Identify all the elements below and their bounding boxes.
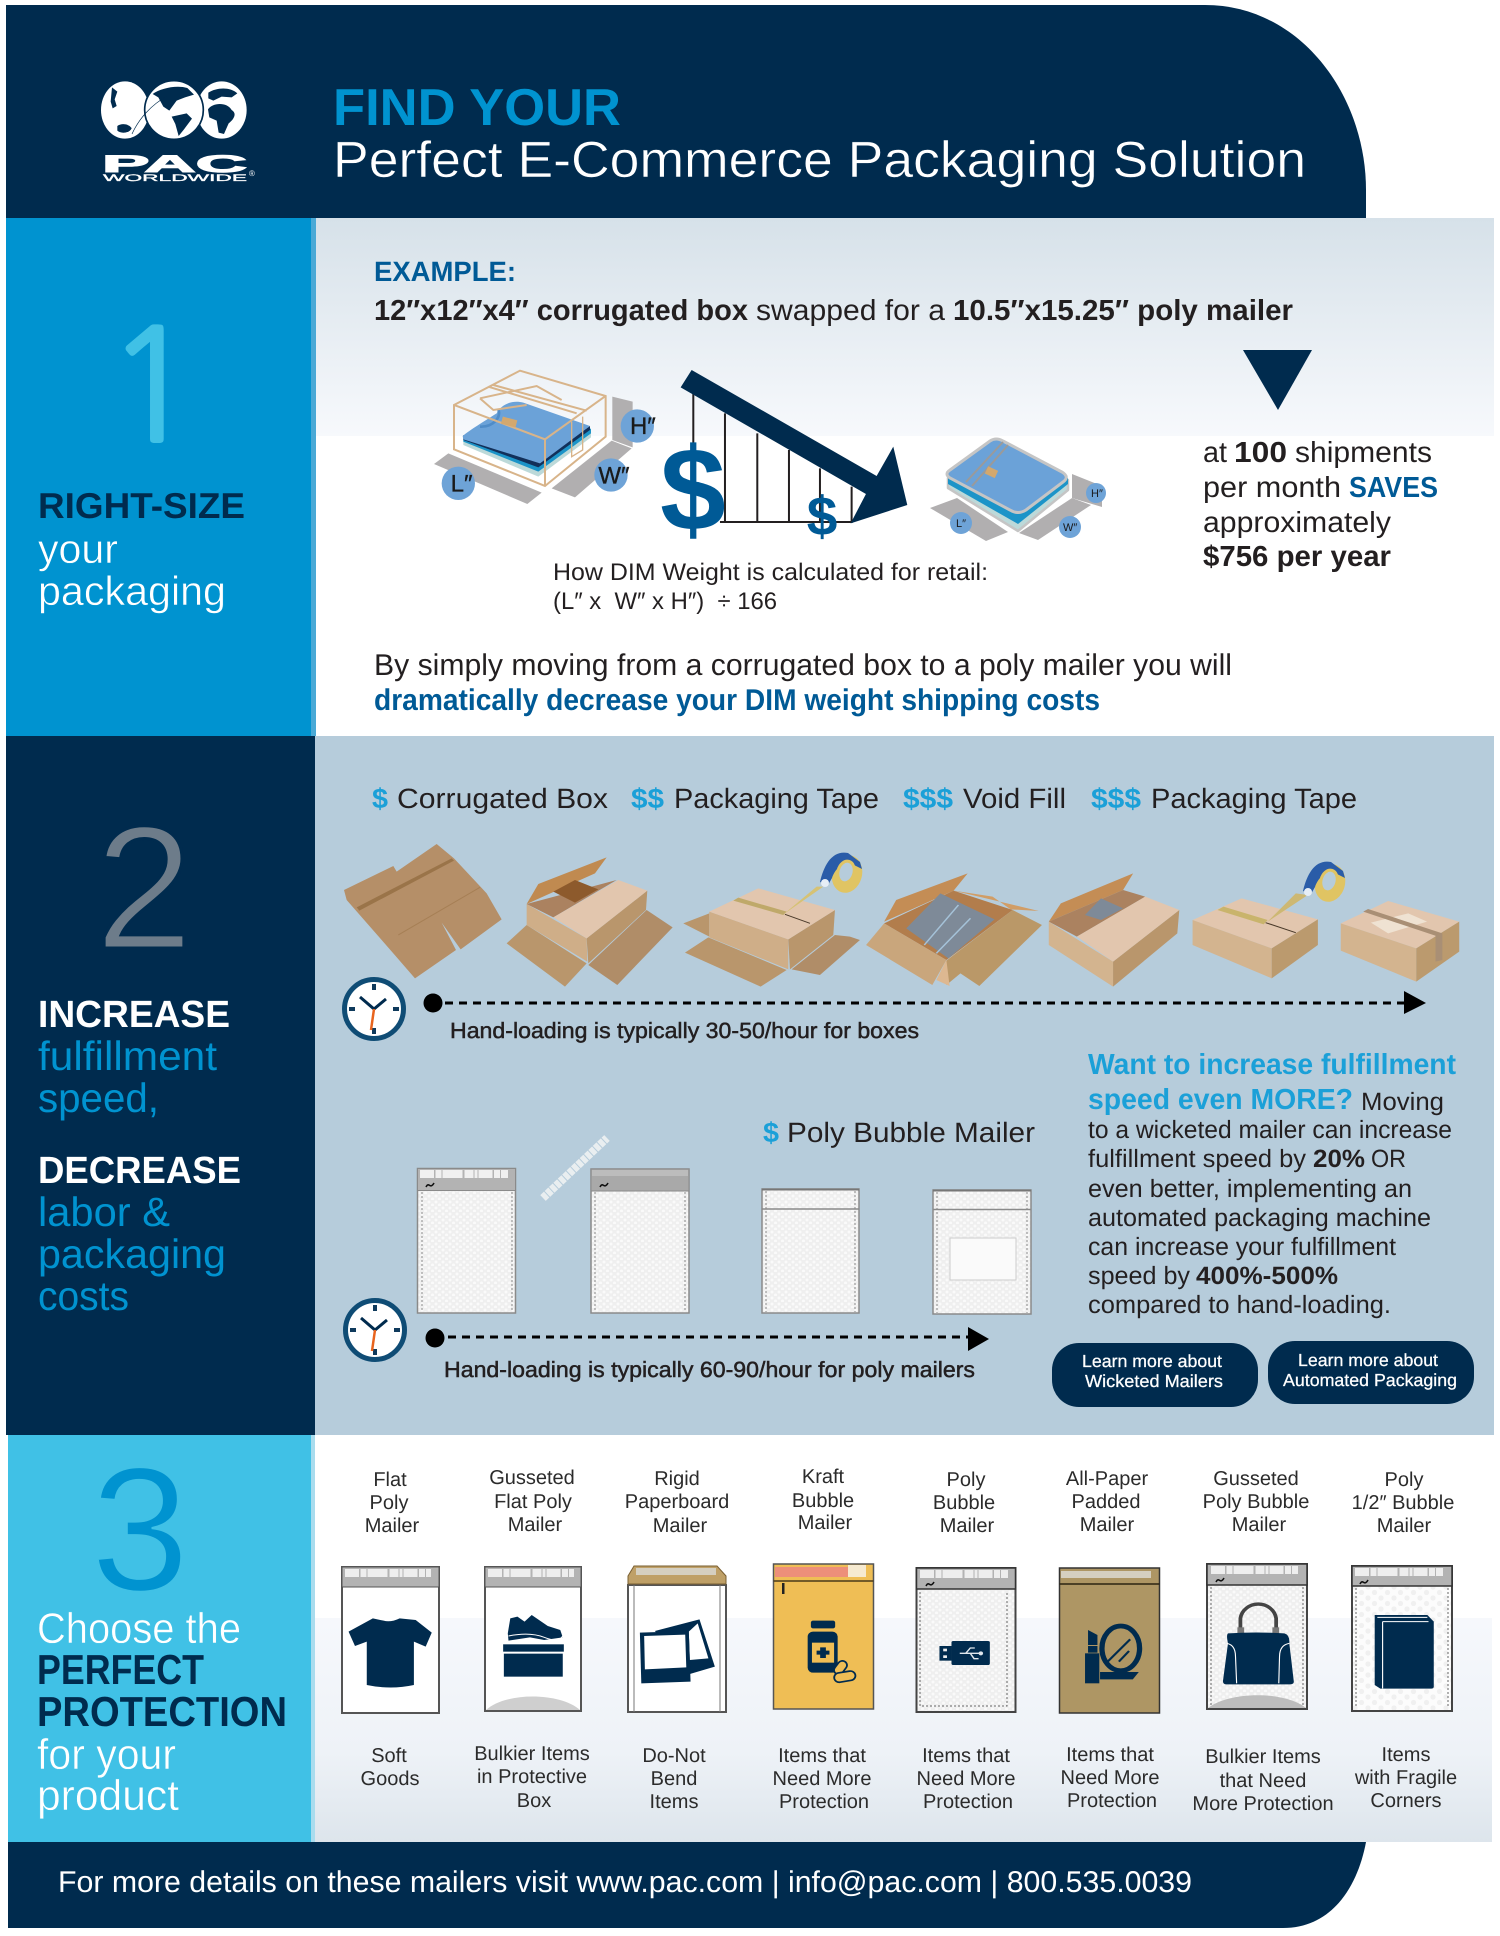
cost row labels: Packaging Tape [1151,783,1357,814]
button: wicketed mailers [1052,1343,1258,1407]
illustration: poly mailer steps [418,1138,1031,1314]
timeline one [424,991,1426,1014]
mailer step two [591,1169,689,1313]
mailer column: gusseted flat poly: Mailer [508,1514,563,1536]
mailer column: gusseted flat poly: Box [517,1790,551,1812]
section 3 heading: PROTECTION [37,1688,287,1735]
icon: shoe on box [503,1615,564,1677]
mailer column: poly bubble: Bubble [933,1492,995,1514]
callout: increase fulfillment: speed by [1088,1262,1190,1290]
section 1 heading: RIGHT-SIZE [38,485,245,526]
mailer column: all-paper padded: Mailer [1080,1514,1135,1536]
section 2 heading: fulfillment [38,1033,218,1079]
mailer column: flat poly: Soft [371,1745,407,1767]
section 1 conclusion: By simply moving from a corrugated box to a poly mailer you will [374,649,1232,682]
mailer column: kraft bubble: Items that [778,1745,866,1767]
mailer column: gusseted poly bubble: Gusseted [1213,1468,1299,1490]
cost row labels: Packaging Tape [674,783,879,814]
icon: clock two [346,1300,404,1360]
mailer column: all-paper padded: Items that [1066,1744,1154,1766]
mailer column: kraft bubble [773,1466,874,1813]
callout: increase fulfillment: speed even MORE? [1088,1084,1353,1116]
mailer column: gusseted flat poly: Gusseted [489,1467,575,1489]
hand-loading boxes note: Hand-loading is typically 30-50/hour for boxes [450,1018,919,1043]
callout: increase fulfillment: Want to increase fulfillment [1088,1049,1456,1081]
mailer column: gusseted flat poly: Flat Poly [494,1491,572,1513]
example text [374,256,1293,327]
mailer step four [933,1190,1031,1314]
icon: down triangle [1243,350,1312,410]
mailer column: gusseted flat poly: in Protective [477,1766,587,1788]
mailer column: kraft bubble: Bubble [792,1490,854,1512]
mailer column: all-paper padded: Need More [1061,1767,1159,1789]
DIM weight formula: How DIM Weight is calculated for retail: [553,559,988,586]
button: automated packaging: Learn more about [1298,1350,1438,1370]
callout: increase fulfillment: compared to hand-loading. [1088,1291,1391,1319]
example text: 10.5″x15.25″ poly mailer [953,295,1293,327]
section 1 conclusion [374,649,1232,717]
mailer column: gusseted poly bubble: Poly Bubble [1203,1491,1309,1513]
mailer step one [418,1168,516,1313]
mailer column: gusseted poly bubble: Mailer [1232,1514,1287,1536]
mailer column: gusseted poly bubble: that Need [1220,1770,1306,1792]
icon: lipstick and mirror [1085,1626,1140,1683]
callout: increase fulfillment: can increase your fulfillment [1088,1233,1396,1261]
callout: increase fulfillment: to a wicketed mailer can increase [1088,1116,1452,1144]
mailer column: rigid paperboard: Bend [651,1768,697,1790]
savings text: 100 [1234,437,1287,469]
hand-loading mailers note: Hand-loading is typically 60-90/hour for poly mailers [444,1357,975,1382]
callout: increase fulfillment: 400%-500% [1196,1262,1338,1290]
mailer column: rigid paperboard: Paperboard [625,1491,729,1513]
illustration: corrugated box dimensions: L″ [451,470,473,497]
callout: increase fulfillment: OR [1371,1145,1406,1173]
callout: increase fulfillment: fulfillment speed by [1088,1145,1306,1173]
mailer column: gusseted flat poly: Bulkier Items [474,1743,590,1765]
panel: section 1 right-size [6,218,1494,736]
mailer column: poly bubble: Mailer [940,1515,995,1537]
section 2 heading: DECREASE [38,1150,241,1192]
illustration: poly mailer dimensions [930,439,1106,541]
cost row labels: $ [372,783,388,814]
mailer column: poly bubble [916,1469,1016,1813]
mailer column: half-inch poly bubble [1352,1469,1457,1812]
title: Perfect E-Commerce Packaging Solution [333,131,1306,188]
mailer column: half-inch poly bubble: 1/2″ Bubble [1352,1492,1454,1514]
button: wicketed mailers: Learn more about [1082,1351,1222,1371]
mailer column: gusseted poly bubble: Bulkier Items [1205,1746,1321,1768]
mailer column: flat poly [342,1469,439,1790]
panel: section 3 protection [8,1432,1492,1842]
savings text: shipments [1295,437,1432,469]
mailer column: half-inch poly bubble: Poly [1385,1469,1423,1491]
mailer column: half-inch poly bubble: Mailer [1377,1515,1432,1537]
example text: 12″x12″x4″ corrugated box [374,295,748,327]
icon: photos [640,1619,715,1683]
icon: book [1375,1615,1434,1689]
mailer column: poly bubble: Poly [947,1469,985,1491]
illustration: poly mailer dimensions: W″ [1063,522,1077,534]
illustration: falling cost arrow: $ [807,485,837,547]
button: automated packaging: Automated Packaging [1283,1370,1457,1390]
illustration: poly mailer dimensions: L″ [956,518,966,530]
mailer column: half-inch poly bubble: Corners [1370,1790,1442,1812]
mailer column: poly bubble: Items that [922,1745,1010,1767]
illustration: falling cost arrow [660,370,907,556]
illustration: poly mailer dimensions: H″ [1091,488,1103,500]
section 2 heading: speed, [38,1075,159,1121]
callout: increase fulfillment: Moving [1361,1088,1444,1116]
cost row labels: $$$ [1091,783,1141,814]
section 2 heading: costs [38,1273,129,1319]
mailer column: poly bubble: Protection [923,1791,1013,1813]
mailer column: all-paper padded [1060,1468,1160,1812]
DIM weight formula [553,559,988,615]
mailer column: kraft bubble: Protection [779,1791,869,1813]
icon: tape dispenser one [820,852,866,896]
savings text [1203,437,1438,573]
section 3 heading: product [37,1772,179,1820]
mailer column: all-paper padded: Protection [1067,1790,1157,1812]
mailer step three [762,1189,859,1313]
mailer column: half-inch poly bubble: Items [1382,1744,1430,1766]
button: automated packaging [1268,1341,1474,1404]
mailer column: flat poly: Flat [373,1469,407,1491]
mailer column: all-paper padded: Padded [1072,1491,1140,1513]
footer band: For more details on these mailers visit www.pac.com | info@pac.com | 800.535.0039 [58,1866,1192,1899]
poly bubble mailer label: $ [763,1117,779,1148]
section 2 heading: packaging [38,1231,226,1277]
cost row labels: Void Fill [963,783,1066,814]
illustration: box steps four to seven [866,873,1459,987]
logo: WORLDWIDE [103,173,247,184]
mailer column: kraft bubble: Mailer [798,1512,853,1534]
section 2 heading: INCREASE [38,994,230,1036]
footer band [8,1842,1366,1928]
icon: USB drive [939,1641,990,1665]
mailer column: kraft bubble: Need More [773,1768,871,1790]
peel strip [543,1138,607,1198]
mailer column: all-paper padded: All-Paper [1066,1468,1148,1490]
panel: section 2 speed [6,736,1494,1435]
section 1 heading [38,485,245,614]
mailer column: gusseted flat poly [474,1467,590,1812]
icon: t-shirt [349,1618,432,1687]
callout: increase fulfillment [1088,1049,1456,1319]
illustration: corrugated box dimensions [434,371,656,504]
mailer column: flat poly: Goods [361,1768,419,1790]
button: wicketed mailers: Wicketed Mailers [1085,1371,1223,1391]
poly bubble mailer label: Poly Bubble Mailer [787,1117,1035,1148]
mailer column: flat poly: Mailer [365,1515,420,1537]
section 1 conclusion: dramatically decrease your DIM weight shipping costs [374,684,1100,717]
cost row labels [372,783,1357,814]
mailer column: gusseted poly bubble [1192,1468,1334,1815]
logo [101,81,255,184]
icon: handbag [1223,1604,1294,1684]
illustration: corrugated box dimensions: W″ [598,462,629,489]
mailer column: kraft bubble: Kraft [802,1466,845,1488]
illustration: corrugated box dimensions: H″ [630,413,656,439]
mailer column: rigid paperboard: Items [650,1791,698,1813]
title [333,79,1306,188]
example text: EXAMPLE: [374,256,516,287]
mailer column: rigid paperboard: Rigid [654,1468,700,1490]
timeline two [426,1327,989,1351]
mailer column: rigid paperboard: Do-Not [642,1745,706,1767]
savings text: approximately [1203,507,1392,539]
savings text: SAVES [1349,472,1438,504]
section 1 heading: packaging [38,568,226,614]
number 2: 2 [95,791,193,986]
cost row labels: $$ [631,783,664,814]
title: FIND YOUR [333,79,621,137]
savings text: at [1203,437,1227,469]
section 3 heading: PERFECT [37,1646,204,1693]
callout: increase fulfillment: even better, implementing an [1088,1175,1412,1203]
mailer column: rigid paperboard [625,1468,729,1813]
icon: clock one [344,980,404,1038]
DIM weight formula: (L″ x W″ x H″) ÷ 166 [553,588,777,615]
header band [6,5,1366,218]
cost row labels: Corrugated Box [397,783,608,814]
logo: ® [249,169,255,178]
mailer column: rigid paperboard: Mailer [653,1515,708,1537]
section 2 heading: labor & [38,1189,170,1235]
cost row labels: $$$ [903,783,953,814]
illustration: box steps one to three [344,844,860,987]
icon: medicine bottle [808,1621,856,1683]
savings text: per month [1203,472,1341,504]
section 1 heading: your [38,526,118,572]
logo: PAC [102,151,247,178]
section 3 heading: for your [37,1731,176,1779]
section 2 heading [38,994,241,1319]
example text: swapped for a [756,295,946,327]
callout: increase fulfillment: automated packaging machine [1088,1204,1431,1232]
mailer column: gusseted poly bubble: More Protection [1192,1793,1334,1815]
mailer column: half-inch poly bubble: with Fragile [1354,1767,1457,1789]
mailer column: flat poly: Poly [370,1492,408,1514]
mailer column: poly bubble: Need More [917,1768,1015,1790]
savings text: $756 per year [1203,541,1391,573]
illustration: falling cost arrow: $ [660,424,726,556]
number 1: 1 [105,309,199,464]
number 3: 3 [91,1432,189,1628]
section 3 heading: Choose the [37,1605,241,1653]
icon: tape dispenser two [1303,861,1349,905]
callout: increase fulfillment: 20% [1313,1145,1365,1173]
section 3 heading [37,1605,287,1820]
